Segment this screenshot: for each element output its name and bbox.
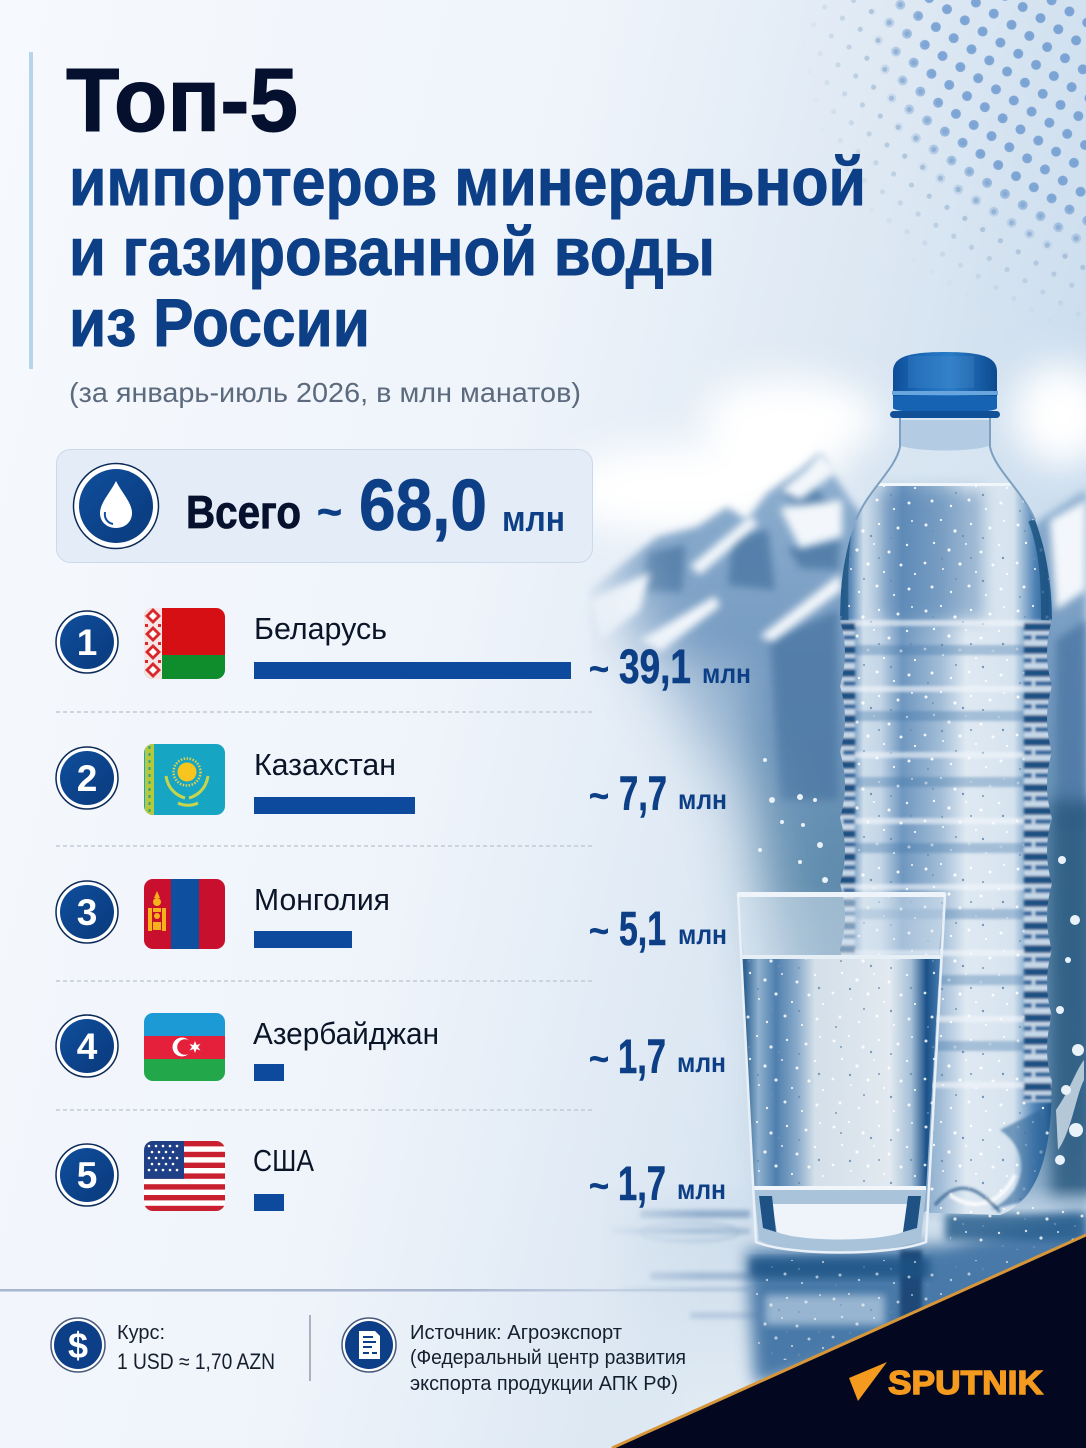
glass base	[754, 1190, 926, 1252]
source text: Источник: Агроэкспорт	[410, 1322, 622, 1344]
rank 3	[56, 881, 118, 943]
country name: Монголия	[254, 882, 390, 917]
value: ~	[589, 775, 609, 816]
bar	[254, 1064, 284, 1081]
row 2: Kazakhstan	[56, 744, 727, 821]
country name: Беларусь	[254, 611, 387, 646]
value: 1,7	[618, 1158, 666, 1211]
row 1: Belarus	[56, 608, 751, 694]
reflection	[746, 1205, 1086, 1385]
glass upper wall	[738, 896, 945, 958]
subtitle lines: импортеров минеральной	[69, 144, 866, 220]
flag: Mongolia	[144, 879, 225, 949]
flag: USA	[144, 1141, 225, 1211]
source text	[410, 1322, 686, 1395]
value	[589, 1031, 726, 1084]
value: млн	[678, 784, 727, 815]
water bottle	[830, 352, 1060, 1220]
halftone dot pattern	[812, 0, 1086, 314]
value: ~	[589, 1038, 609, 1079]
country name: США	[253, 1143, 314, 1178]
bar	[254, 662, 571, 679]
value: 39,1	[619, 641, 691, 694]
subtitle lines	[69, 144, 866, 361]
bottle shoulder outline	[856, 417, 1035, 520]
title accent bar	[29, 52, 33, 369]
bottle ribs	[838, 620, 1054, 1212]
glass of water	[737, 892, 946, 1252]
row 3: Mongolia	[56, 879, 727, 956]
total panel: ~	[317, 488, 342, 535]
source text: (Федеральный центр развития	[410, 1347, 686, 1369]
flag: Azerbaijan	[144, 1013, 225, 1081]
value: ~	[589, 1165, 609, 1206]
water streaks	[610, 1210, 760, 1319]
value: 5,1	[619, 903, 666, 956]
title: Топ-5	[66, 51, 298, 151]
bottle neck	[901, 420, 989, 450]
dark right edge	[1050, 800, 1086, 1200]
country name: Азербайджан	[253, 1016, 439, 1051]
logo: Sputnik: SPUTNIK	[888, 1364, 1043, 1401]
brand corner	[612, 1235, 1086, 1448]
value: млн	[702, 658, 751, 689]
value	[589, 1158, 726, 1211]
value: ~	[589, 648, 609, 689]
value	[589, 903, 727, 956]
bottle cap	[890, 352, 1000, 418]
water splash droplets	[758, 758, 1084, 1165]
exchange rate note	[51, 1318, 275, 1374]
rank 5	[56, 1144, 118, 1206]
icon: water drop	[74, 464, 158, 548]
value: 1,7	[618, 1031, 666, 1084]
rank 4	[56, 1015, 118, 1077]
rank 2: 2	[77, 758, 97, 799]
source text: экспорта продукции АПК РФ)	[410, 1373, 678, 1395]
haze	[651, 650, 762, 860]
bottle body	[840, 481, 1052, 1215]
subtitle lines: и газированной воды	[69, 214, 715, 290]
rank 5: 5	[77, 1155, 97, 1196]
clouds	[560, 363, 1086, 535]
flag: Belarus	[144, 608, 225, 679]
value: 7,7	[619, 768, 667, 821]
total value: 68,0	[359, 466, 487, 546]
title block	[29, 51, 866, 369]
value	[589, 641, 751, 694]
rank 1	[56, 611, 118, 673]
rank 1: 1	[77, 622, 97, 663]
mountain photo backdrop	[590, 453, 1086, 1240]
bar	[254, 1194, 284, 1211]
source note	[342, 1318, 686, 1395]
flag: Kazakhstan	[144, 744, 225, 815]
row 5: USA	[56, 1141, 726, 1211]
total panel	[56, 450, 592, 562]
snow	[590, 453, 1086, 652]
dark rock	[640, 478, 1086, 830]
value: млн	[677, 1174, 726, 1205]
water surface	[616, 1188, 1086, 1414]
rank 4: 4	[77, 1026, 98, 1067]
rate text: Курс:	[117, 1322, 165, 1344]
value: ~	[589, 910, 609, 951]
country name: Казахстан	[254, 747, 396, 782]
value: млн	[678, 919, 727, 950]
total panel: млн	[502, 498, 565, 539]
bar	[254, 797, 415, 814]
rank 3: 3	[77, 892, 97, 933]
value	[589, 768, 727, 821]
value: млн	[677, 1047, 726, 1078]
rank 2	[56, 747, 118, 809]
icon: dollar: $	[68, 1325, 88, 1366]
subtitle lines: из России	[69, 285, 370, 361]
icon: document	[342, 1318, 396, 1372]
row 4: Azerbaijan	[56, 1013, 726, 1084]
glass water	[742, 958, 940, 1190]
total label: Всего	[186, 486, 301, 538]
period note: (за январь-июль 2026, в млн манатов)	[69, 377, 581, 408]
icon: dollar	[51, 1318, 105, 1372]
exchange rate note: 1 USD ≈ 1,70 AZN	[117, 1349, 275, 1374]
bar	[254, 931, 352, 948]
